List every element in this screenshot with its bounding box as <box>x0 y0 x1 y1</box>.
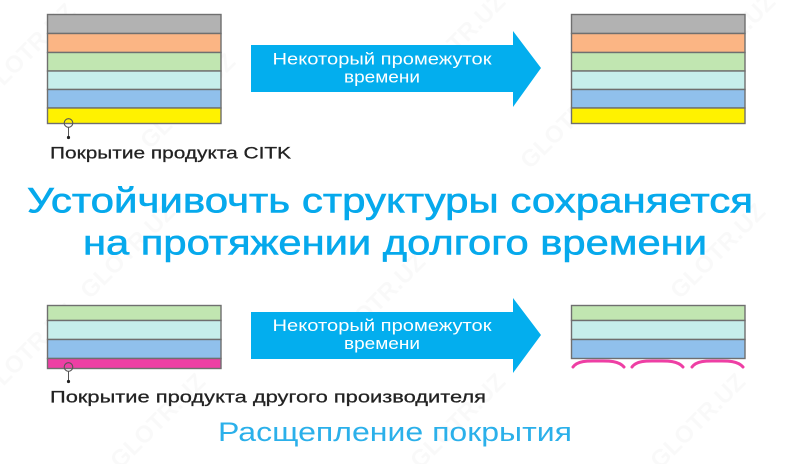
headline: на протяжении долгого времени <box>83 224 707 262</box>
layer stack: top right <box>572 14 745 124</box>
layer stack: top left <box>48 14 221 124</box>
text: GLOTR.UZ <box>665 198 771 304</box>
layer stack: bottom left <box>48 306 221 368</box>
arrow: top: Некоторый промежуток <box>272 50 492 68</box>
text: GLOTR.UZ <box>75 198 181 304</box>
text: GLOTR.UZ <box>135 48 241 154</box>
pointer: bottom left <box>64 363 73 383</box>
label: CITK coating: Покрытие продукта CITK <box>50 144 291 162</box>
arrow: bottom: времени <box>344 335 420 353</box>
arrow: bottom <box>251 298 541 373</box>
text: GLOTR.UZ <box>515 68 621 174</box>
text: GLOTR.UZ <box>325 248 431 354</box>
arrow: top: времени <box>344 68 420 86</box>
arrow: bottom: Некоторый промежуток <box>272 317 492 335</box>
delaminated coating arcs <box>573 361 743 367</box>
pointer: top left <box>64 119 73 139</box>
layer stack: bottom right <box>572 306 745 358</box>
label: other manufacturer coating: Покрытие продукта другого производителя <box>50 388 486 406</box>
headline: Устойчивочть структуры сохраняется <box>27 182 753 220</box>
arrow: top <box>251 31 541 107</box>
caption: delamination: Расщепление покрытия <box>218 417 572 447</box>
headline <box>27 182 753 262</box>
